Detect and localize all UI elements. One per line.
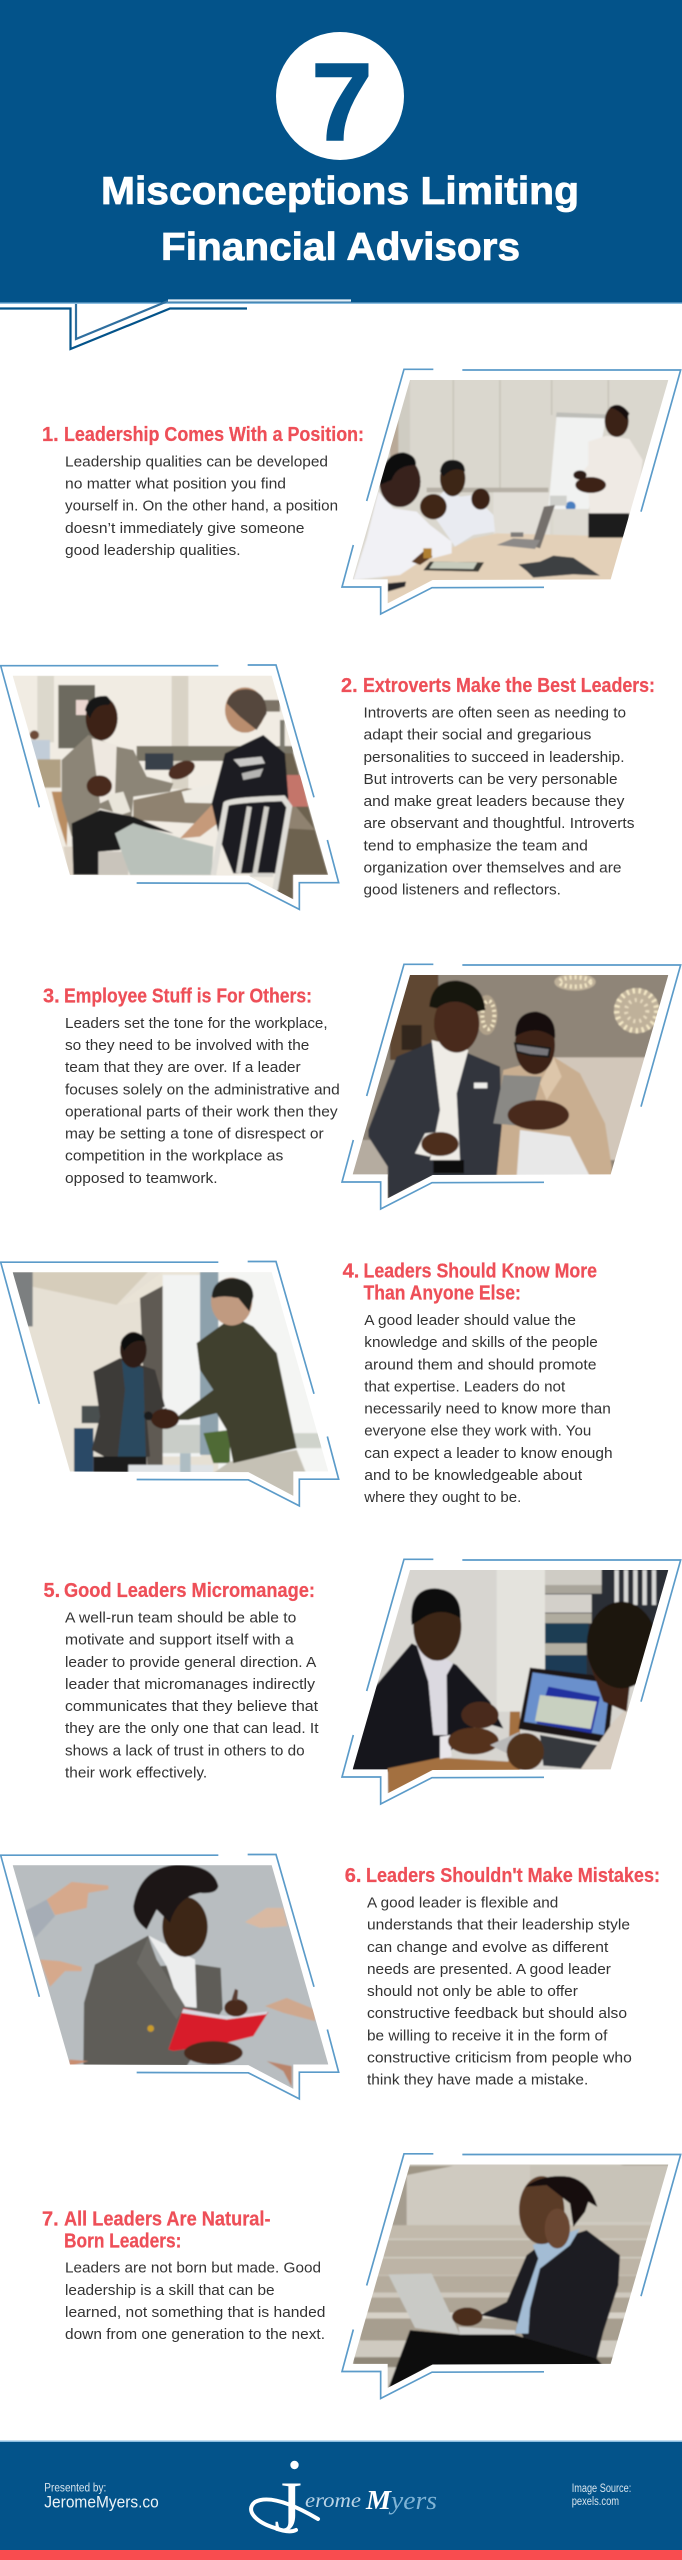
body text 5: leader to provide general direction. A [65, 1654, 316, 1671]
body text 6: can change and evolve as different [367, 1939, 609, 1956]
photo: two men with a tablet [340, 960, 682, 1215]
body text 4: around them and should promote [364, 1356, 596, 1373]
body text 3: focuses solely on the administrative and [65, 1081, 340, 1098]
body text 1: yourself in. On the other hand, a position [65, 498, 338, 515]
heading 7: All Leaders Are Natural- [64, 2208, 270, 2230]
logo: erome [305, 2490, 361, 2512]
body text 5: they are the only one that can lead. It [65, 1720, 319, 1737]
logo: yers [388, 2486, 437, 2515]
header speech tail lines [0, 300, 351, 349]
title: Misconceptions Limiting [101, 170, 579, 213]
body text 3: team that they are over. If a leader [65, 1059, 301, 1076]
presented by [44, 2483, 159, 2512]
body text 3: operational parts of their work then they [65, 1103, 338, 1120]
panel 4: leaders should know more than anyone else [0, 1256, 613, 1511]
footer [0, 2440, 682, 2560]
photo: conversation at a cafe table [0, 660, 342, 915]
heading 7: Born Leaders: [64, 2230, 181, 2252]
presented by: JeromeMyers.co [44, 2493, 159, 2512]
body text 2: personalities to succeed in leadership. [364, 749, 624, 766]
panel 6: leaders shouldn't make mistakes [0, 1850, 660, 2104]
title: Financial Advisors [161, 226, 520, 269]
body text 5: shows a lack of trust in others to do [65, 1742, 305, 1759]
presented by: Presented by: [44, 2483, 106, 2495]
body text 5: motivate and support itself with a [65, 1632, 294, 1649]
body text 2: and make great leaders because they [364, 793, 625, 810]
body text 1: no matter what position you find [65, 476, 286, 493]
heading 4 [343, 1260, 597, 1305]
heading 2: Extroverts Make the Best Leaders: [363, 675, 655, 697]
panel 7: all leaders are natural-born leaders [42, 2145, 682, 2412]
heading 1: Leadership Comes With a Position: [64, 424, 364, 446]
body text 5: leader that micromanages indirectly [65, 1676, 316, 1693]
body text 7 [65, 2260, 325, 2343]
body text 6: should not only be able to offer [367, 1983, 578, 2000]
image source: Image Source: [572, 2483, 631, 2495]
photo: meeting room presentation [340, 365, 682, 620]
photo frame lines [1, 1262, 339, 1506]
heading 5: 5. [44, 1580, 60, 1602]
body text 7: down from one generation to the next. [65, 2326, 325, 2343]
body text 5: their work effectively. [65, 1764, 207, 1782]
body text 5: A well-run team should be able to [65, 1610, 296, 1626]
body text 6: needs are presented. A good leader [367, 1961, 611, 1978]
heading 5: Good Leaders Micromanage: [64, 1580, 315, 1602]
photo frame lines [1, 665, 339, 909]
photo frame lines [342, 964, 681, 1209]
body text 6: understands that their leadership style [367, 1917, 630, 1934]
body text 2: adapt their social and gregarious [364, 727, 591, 744]
body text 1: good leadership qualities. [65, 542, 240, 559]
body text 6 [367, 1894, 632, 2089]
body text 2: are observant and thoughtful. Introverts [364, 815, 634, 832]
body text 3: may be setting a tone of disrespect or [65, 1126, 324, 1143]
panel 5: good leaders micromanage [44, 1555, 682, 1810]
heading 2: 2. [341, 675, 358, 697]
body text 4: knowledge and skills of the people [364, 1334, 598, 1351]
body text 2: good listeners and reflectors. [364, 882, 561, 899]
body text 1: Leadership qualities can be developed [65, 453, 328, 470]
photo frame lines [342, 369, 681, 614]
panel 2: extroverts make the best leaders [0, 660, 655, 915]
body text 6: A good leader is flexible and [367, 1894, 558, 1912]
body text 2: organization over themselves and are [364, 860, 622, 876]
heading 3: Employee Stuff is For Others: [64, 986, 312, 1008]
body text 7: learned, not something that is handed [65, 2304, 325, 2321]
body text 6: be willing to receive it in the form of [367, 2027, 608, 2044]
body text 4 [363, 1312, 613, 1506]
image source: pexels.com [572, 2496, 619, 2508]
number badge: 7 [311, 41, 373, 164]
body text 6: constructive criticism from people who [367, 2050, 632, 2066]
heading 4: 4. [343, 1260, 359, 1282]
body text 4: everyone else they work with. You [364, 1423, 591, 1440]
panel 3: employee stuff is for others [43, 960, 682, 1215]
body text 3: competition in the workplace as [65, 1148, 283, 1165]
body text 2: Introverts are often seen as needing to [364, 704, 626, 722]
body text 1 [65, 453, 338, 559]
photo: handshake by the window [0, 1256, 342, 1511]
body text 4: and to be knowledgeable about [364, 1467, 583, 1484]
body text 2 [364, 704, 634, 899]
heading 7 [42, 2208, 270, 2252]
logo: M [365, 2485, 392, 2515]
header banner [0, 0, 682, 349]
body text 3: so they need to be involved with the [65, 1037, 309, 1054]
body text 5 [65, 1610, 319, 1782]
body text 7: Leaders are not born but made. Good [65, 2260, 321, 2277]
body text 5: communicates that they believe that [65, 1698, 319, 1715]
panel 1: leadership comes with a position [42, 365, 682, 620]
photo: hands pointing at a man with a red notebook [0, 1850, 342, 2104]
body text 2: tend to emphasize the team and [364, 837, 588, 854]
photo: man with laptop on stone steps [340, 2145, 682, 2412]
body text 4: can expect a leader to know enough [364, 1445, 613, 1462]
body text 1: doesn’t immediately give someone [65, 520, 304, 537]
body text 4: where they ought to be. [363, 1489, 521, 1506]
body text 4: A good leader should value the [364, 1312, 576, 1329]
heading 3: 3. [43, 986, 60, 1008]
heading 4: Than Anyone Else: [364, 1283, 521, 1305]
body text 6: constructive feedback but should also [367, 2005, 627, 2022]
body text 3: opposed to teamwork. [65, 1170, 218, 1187]
photo frame lines [342, 2154, 681, 2398]
body text 3 [65, 1015, 340, 1187]
title [101, 170, 579, 269]
body text 7: leadership is a skill that can be [65, 2282, 275, 2299]
image source [572, 2483, 631, 2508]
photo frame lines [1, 1854, 339, 2099]
number badge [276, 32, 404, 164]
heading 6: 6. [345, 1865, 361, 1887]
body text 6: think they have made a mistake. [367, 2072, 588, 2089]
heading 4: Leaders Should Know More [364, 1260, 597, 1282]
body text 2: But introverts can be very personable [364, 771, 618, 788]
photo frame lines [342, 1559, 681, 1804]
body text 3: Leaders set the tone for the workplace, [65, 1015, 328, 1032]
logo: J [274, 2467, 302, 2547]
photo: man talking across a laptop [340, 1555, 682, 1810]
body text 4: that expertise. Leaders do not [364, 1378, 566, 1395]
heading 7: 7. [42, 2208, 59, 2230]
body text 4: necessarily need to know more than [364, 1401, 611, 1418]
logo [251, 2461, 437, 2547]
heading 1: 1. [42, 424, 59, 446]
